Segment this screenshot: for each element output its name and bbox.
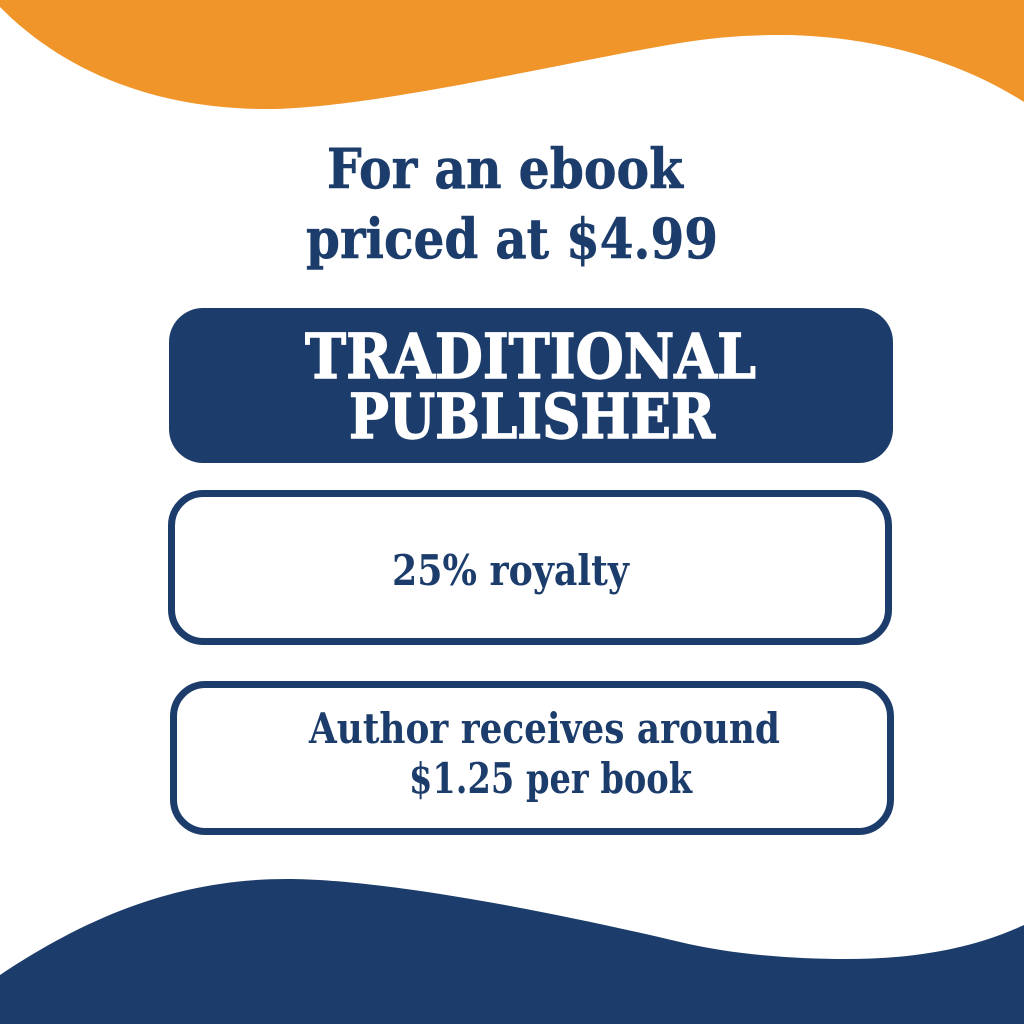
title: [306, 136, 718, 271]
title: priced at $4.99: [306, 206, 718, 271]
panel: traditional publisher heading: [169, 308, 893, 463]
panel: author receives: Author receives around: [308, 704, 780, 753]
panel: traditional publisher heading: TRADITIONAL: [305, 320, 756, 393]
top orange wave: [0, 0, 1024, 109]
panel: royalty: 25% royalty: [392, 546, 630, 595]
title: For an ebook: [327, 136, 685, 201]
panel: traditional publisher heading: PUBLISHER: [349, 380, 715, 453]
panel: royalty: [172, 494, 888, 642]
panel: author receives: [174, 684, 890, 832]
bottom navy wave: [0, 879, 1024, 1024]
panel: author receives: $1.25 per book: [409, 754, 693, 803]
